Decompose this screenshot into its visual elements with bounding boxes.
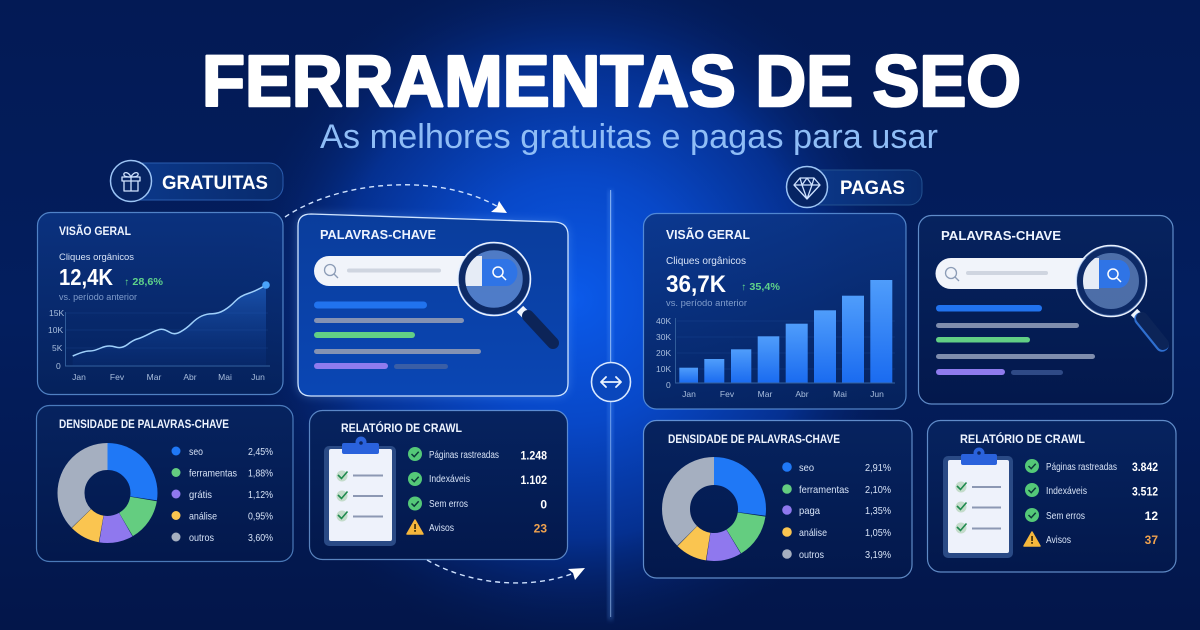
legend: 3,19% (865, 549, 891, 561)
crawl list: Indexáveis (1046, 486, 1087, 497)
icon: comparison arrows (592, 362, 630, 402)
bar chart: 0 (666, 380, 671, 390)
legend: 1,88% (248, 468, 273, 480)
badge: pagas (786, 166, 922, 208)
legend: grátis (189, 489, 212, 501)
legend: 1,05% (865, 527, 891, 539)
metric change: ↑ 35,4% (741, 282, 780, 293)
line chart: Mai (218, 372, 232, 382)
line chart: Jun (251, 372, 265, 382)
line chart: Mar (147, 372, 161, 382)
line chart: 5K (52, 343, 63, 353)
panel: crawl pagas (928, 420, 1176, 572)
legend: análise (189, 510, 217, 522)
bar chart: Jun (870, 389, 884, 399)
central divider (608, 190, 613, 620)
crawl list: 37 (1145, 533, 1158, 547)
metric change: ↑ 28,6% (124, 277, 163, 288)
magnifying glass (1076, 246, 1163, 345)
legend: outros (189, 532, 214, 544)
heading: VISÃO GERAL (666, 227, 750, 242)
legend: 2,91% (865, 462, 891, 474)
legend: 2,45% (248, 446, 273, 458)
bar chart: 30K (656, 332, 671, 342)
legend: seo (799, 462, 814, 474)
title: FERRAMENTAS DE SEO (202, 42, 1021, 122)
crawl list: 23 (534, 522, 547, 536)
legend: 2,10% (865, 484, 891, 496)
panel: crawl gratuitas (310, 410, 568, 560)
bar chart: 20K (656, 348, 671, 358)
result bars (936, 305, 1095, 375)
heading: VISÃO GERAL (59, 223, 131, 238)
badge: gratuitas (110, 160, 283, 202)
crawl list: 1.248 (520, 448, 547, 462)
bar chart: 10K (656, 364, 671, 374)
bar chart: 40K (656, 316, 671, 326)
bar chart: Abr (795, 389, 809, 399)
comparison note: vs. período anterior (59, 292, 137, 302)
icon: diamond (794, 178, 820, 199)
crawl list: Avisos (1046, 535, 1071, 546)
subtitle: As melhores gratuitas e pagas para usar (320, 118, 938, 156)
line chart: Jan (72, 372, 86, 382)
donut chart (676, 471, 752, 547)
arrow: bottom dashed (427, 560, 585, 583)
panel: palavras-chave pagas (918, 216, 1173, 404)
crawl list: Indexáveis (429, 474, 470, 485)
legend: 3,60% (248, 532, 273, 544)
result bars (314, 302, 481, 369)
crawl list: Sem erros (1046, 511, 1085, 522)
legend: análise (799, 527, 827, 539)
crawl list: Sem erros (429, 499, 468, 510)
line chart: 0 (56, 361, 61, 371)
legend (782, 462, 891, 561)
legend: 1,35% (865, 505, 891, 517)
line chart: Abr (183, 372, 197, 382)
comparison note: vs. período anterior (666, 298, 747, 308)
metric label: Cliques orgânicos (666, 256, 746, 267)
heading: PALAVRAS-CHAVE (941, 228, 1061, 243)
crawl list: 1.102 (520, 473, 547, 487)
heading: RELATÓRIO DE CRAWL (341, 420, 462, 435)
icon: gift (122, 173, 140, 191)
bar chart: Fev (720, 389, 735, 399)
legend: paga (799, 505, 820, 517)
metric value: 36,7K (666, 271, 727, 298)
magnifying glass (458, 242, 553, 343)
icon: clipboard (324, 436, 396, 546)
metric value: 12,4K (59, 264, 113, 290)
metric label: Cliques orgânicos (59, 252, 134, 263)
panel: palavras-chave gratuitas (298, 214, 568, 396)
crawl list: Páginas rastreadas (1046, 462, 1117, 473)
legend: ferramentas (799, 484, 849, 496)
bar chart (656, 280, 895, 399)
line chart (48, 281, 270, 382)
panel: densidade gratuitas (36, 406, 293, 562)
crawl list (1024, 459, 1158, 547)
arrow: top dashed (285, 185, 507, 217)
panel: visão geral pagas (644, 214, 906, 409)
bar chart: Jan (682, 389, 696, 399)
heading: PALAVRAS-CHAVE (320, 227, 436, 242)
line chart: 15K (49, 308, 64, 318)
legend: 0,95% (248, 510, 273, 522)
crawl list: 3.842 (1132, 460, 1158, 474)
badge: pagas: PAGAS (840, 178, 905, 199)
bar chart: Mar (758, 389, 772, 399)
crawl list: 12 (1145, 509, 1158, 523)
panel: visão geral gratuitas (38, 212, 283, 394)
crawl list: Avisos (429, 523, 454, 534)
line chart: Fev (110, 372, 125, 382)
crawl list: 3.512 (1132, 484, 1158, 498)
line chart: 10K (48, 325, 63, 335)
heading: DENSIDADE DE PALAVRAS-CHAVE (668, 432, 840, 446)
crawl list: 0 (540, 498, 547, 512)
donut chart (71, 456, 144, 530)
crawl list (407, 447, 547, 536)
icon: clipboard (943, 448, 1013, 558)
panel: densidade pagas (644, 420, 912, 578)
heading: DENSIDADE DE PALAVRAS-CHAVE (59, 417, 229, 431)
legend (172, 446, 273, 544)
heading: RELATÓRIO DE CRAWL (960, 431, 1085, 446)
search bar (935, 258, 1099, 289)
legend: seo (189, 446, 203, 458)
legend: outros (799, 549, 824, 561)
legend: ferramentas (189, 468, 237, 480)
crawl list: Páginas rastreadas (429, 450, 499, 461)
legend: 1,12% (248, 489, 273, 501)
bar chart: Mai (833, 389, 847, 399)
search bar (314, 256, 482, 286)
badge: gratuitas: GRATUITAS (162, 173, 268, 194)
